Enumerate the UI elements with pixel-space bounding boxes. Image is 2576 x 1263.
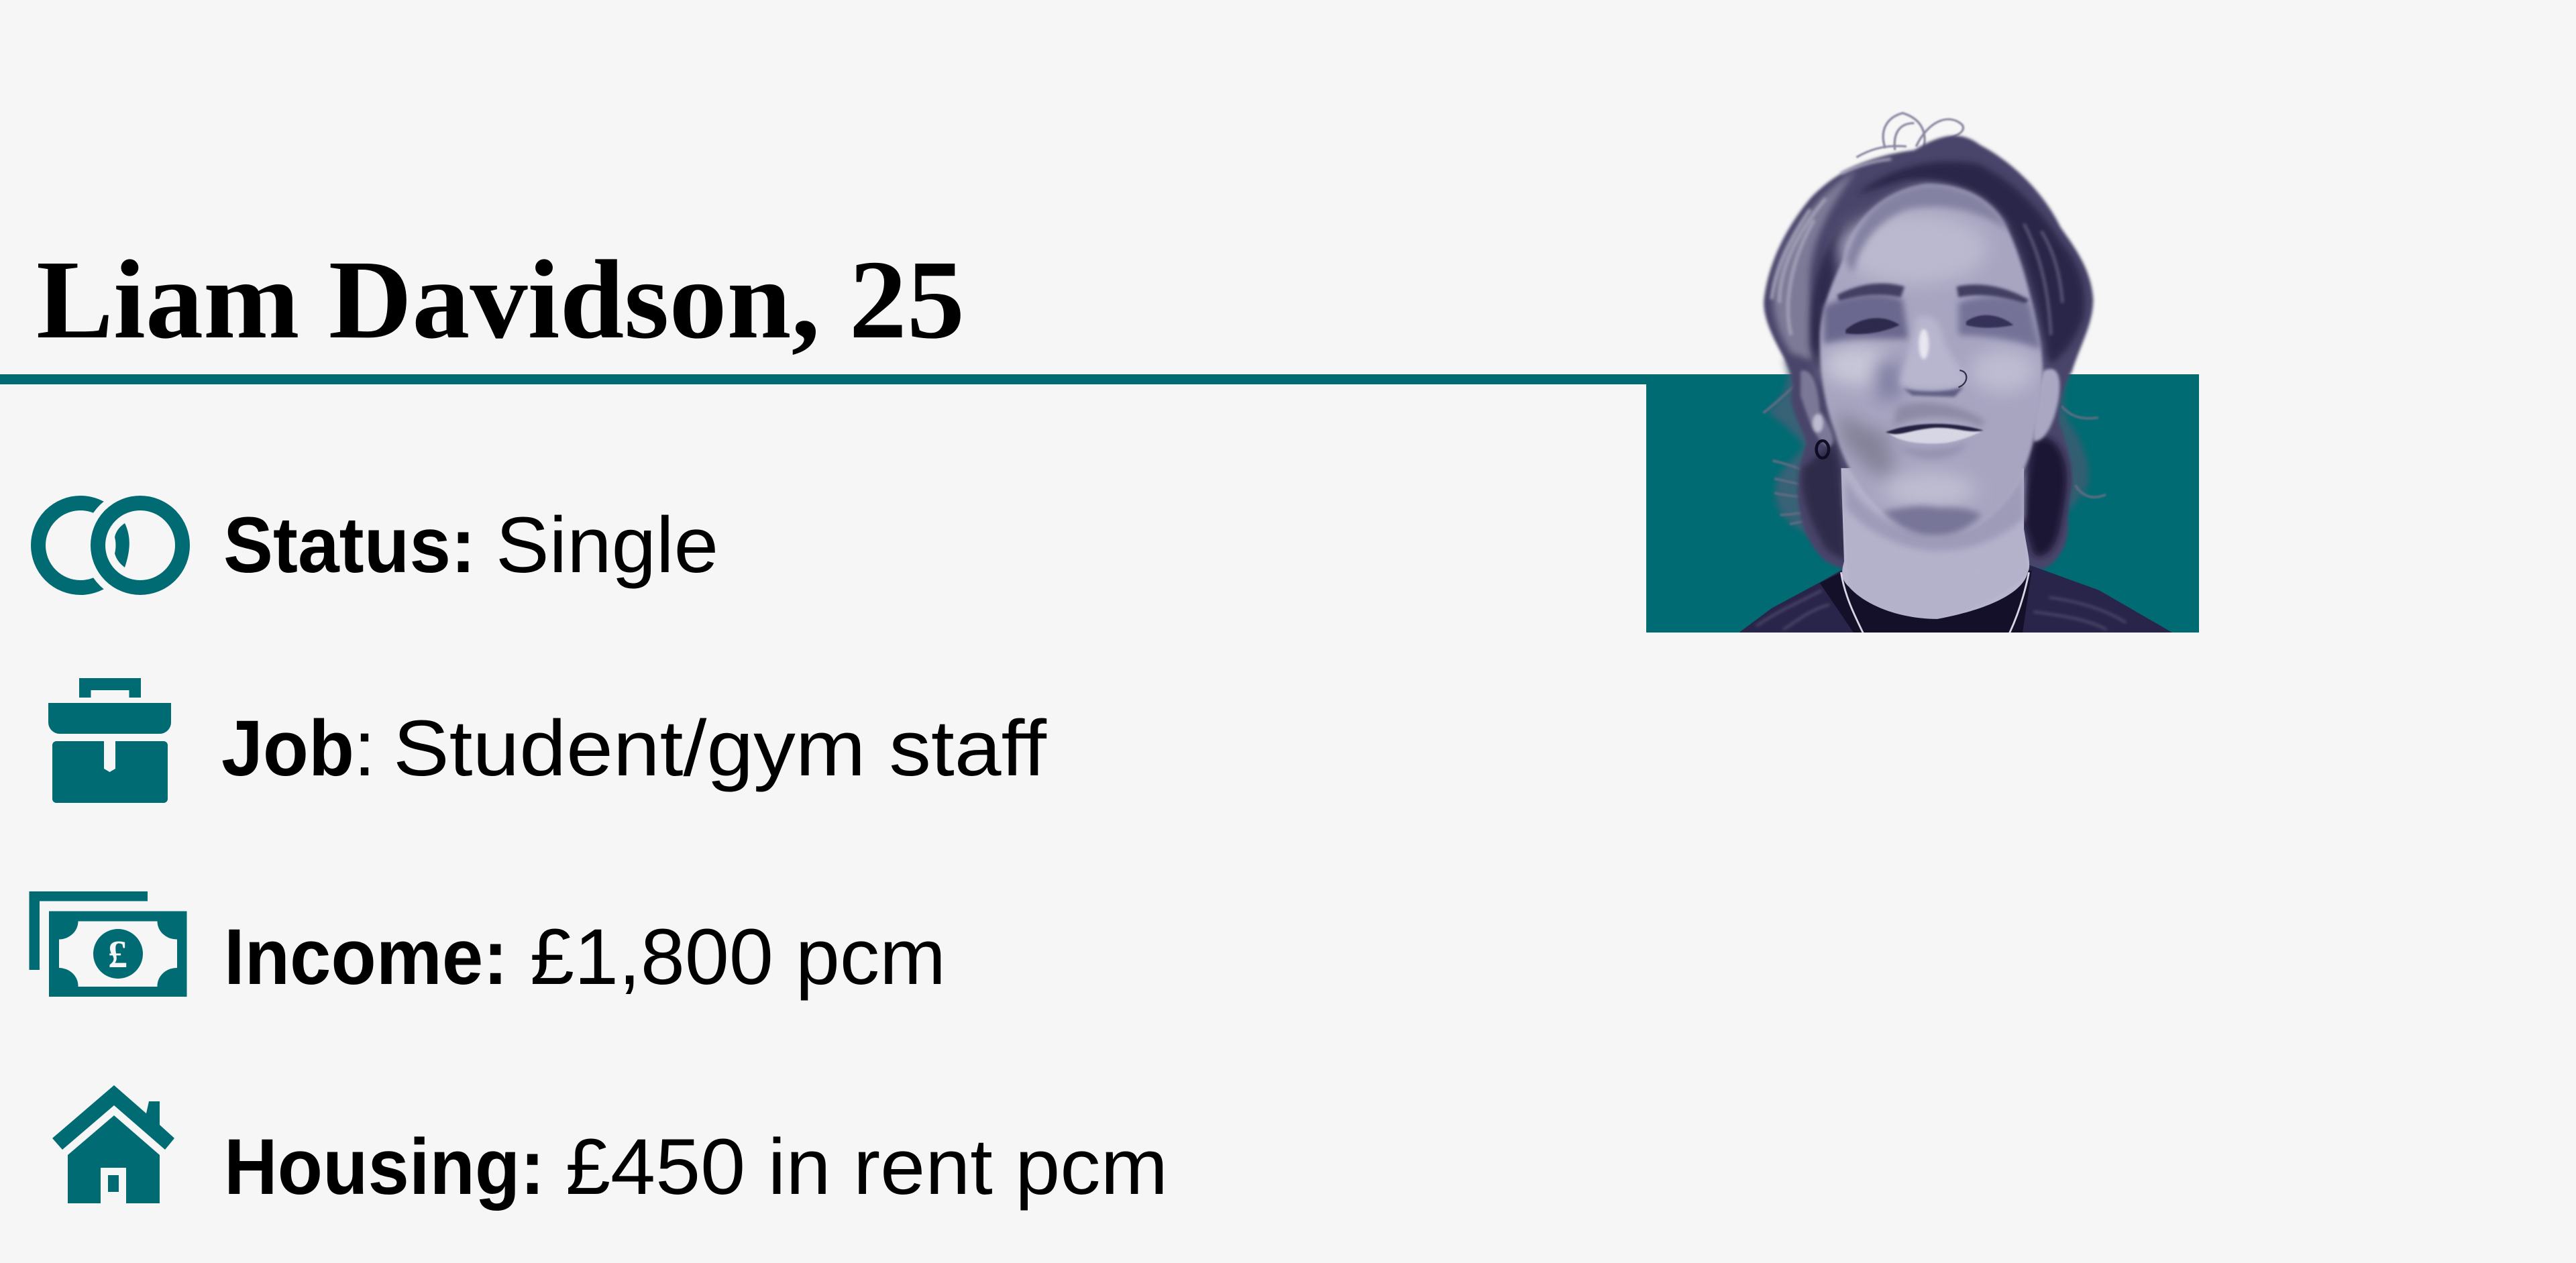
- text: housing: [224, 1123, 1168, 1211]
- left earlobe: [1813, 414, 1823, 433]
- nose: [1900, 316, 1966, 388]
- lower lip: [1897, 442, 1968, 459]
- neck: [1841, 468, 2029, 619]
- smile line: [1886, 424, 1984, 434]
- hair mid-tone left sweep: [1773, 170, 1856, 360]
- hair streak right: [2024, 224, 2062, 335]
- loose hair strands: [1856, 113, 1963, 157]
- moustache shade: [1893, 402, 1986, 427]
- text: job: Job: [221, 704, 354, 793]
- brow socket shade left: [1824, 294, 1909, 344]
- text: job: Student/gym staff: [393, 704, 1046, 793]
- panel: teal portrait background: [1646, 374, 2199, 633]
- text: status: Single: [496, 501, 718, 590]
- left ear: [1801, 370, 1833, 447]
- translucent hair wisps left: [1767, 357, 1807, 537]
- text: income: Income:: [224, 913, 508, 1001]
- icon: briefcase: [48, 678, 171, 803]
- shirt pattern: [1756, 590, 2126, 630]
- teeth: [1888, 427, 1982, 443]
- right cheek: [1970, 349, 2035, 392]
- brow socket shade right: [1958, 296, 2041, 349]
- chin beard: [1884, 506, 1982, 536]
- hairline shade: [1845, 184, 2008, 274]
- text: job: :: [354, 704, 376, 793]
- hair light streaks left: [1772, 159, 1891, 335]
- necklace: [1841, 572, 2029, 635]
- shirt neckline: [1820, 571, 2032, 637]
- hair dark at temple: [1810, 224, 1843, 371]
- text: status: Status:: [223, 501, 476, 590]
- nose side shade: [1876, 357, 1900, 403]
- forehead highlight: [1841, 213, 1988, 285]
- nose ring: [1958, 370, 1966, 387]
- earring: [1817, 441, 1829, 458]
- icon: banknotes: £: [108, 932, 127, 976]
- title: Liam Davidson, 25: [36, 237, 965, 362]
- icon: banknotes: [30, 891, 186, 997]
- text: status: [223, 501, 718, 590]
- left jaw shade: [1837, 410, 1895, 479]
- eyes: [1845, 318, 1900, 334]
- icon: wedding rings: [38, 488, 197, 602]
- text: income: [224, 913, 946, 1001]
- neck shadow: [1845, 468, 2024, 551]
- translucent hair wisps right: [2057, 378, 2092, 512]
- left cheek: [1824, 346, 1893, 386]
- hair dark lower right: [2022, 437, 2067, 556]
- eyebrows: [1837, 284, 1904, 301]
- nose highlight: [1919, 329, 1929, 360]
- portrait photo: [1733, 113, 2180, 637]
- chin light: [1884, 472, 1976, 508]
- face: [1820, 184, 2043, 535]
- icon: house: [52, 1085, 174, 1203]
- nostril shade: [1903, 386, 1964, 397]
- hair dark right and top: [1856, 162, 2084, 364]
- right ear: [2033, 369, 2059, 441]
- frayed hair edges: [1764, 382, 2105, 524]
- text: housing: £450 in rent pcm: [566, 1123, 1168, 1211]
- hair lower left: [1802, 439, 1847, 561]
- hair mass: [1764, 135, 2093, 569]
- text: housing: Housing:: [224, 1123, 545, 1211]
- halftone grain: [1820, 184, 2043, 619]
- heading rule: [0, 374, 1646, 384]
- shirt: [1733, 565, 2180, 637]
- text: income: £1,800 pcm: [530, 913, 946, 1001]
